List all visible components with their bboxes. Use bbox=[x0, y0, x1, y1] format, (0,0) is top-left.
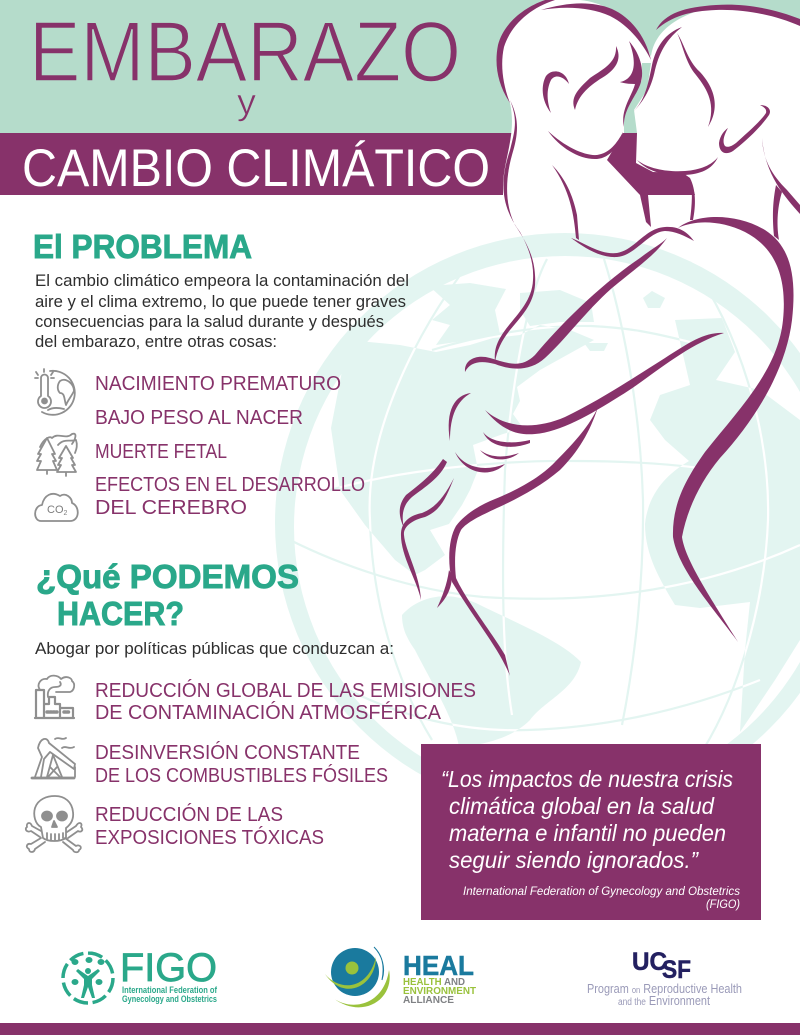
list: policy actions: REDUCCIÓN DE LAS bbox=[95, 803, 283, 826]
title: cambio climatico: CAMBIO CLIMÁTICO bbox=[22, 139, 490, 198]
quote panel: “Los impactos de nuestra crisis bbox=[441, 766, 733, 792]
child foot bbox=[400, 459, 447, 528]
mother hair top bbox=[656, 5, 800, 30]
list: policy actions bbox=[95, 679, 476, 849]
logo: UCSF: and the Environment bbox=[618, 993, 710, 1008]
mother arm bbox=[485, 333, 724, 434]
logo: FIGO: International Federation of bbox=[122, 985, 218, 996]
mother and child line art bbox=[400, 0, 800, 676]
paragraph: problem description bbox=[35, 271, 409, 351]
child shoulder bbox=[571, 227, 694, 257]
logo: FIGO bbox=[63, 946, 218, 1005]
icon: co2 cloud: 2 bbox=[64, 510, 68, 517]
list: health effects bbox=[95, 373, 365, 519]
paragraph: advocacy intro: Abogar por políticas públicas que conduzcan a: bbox=[35, 639, 394, 658]
mother hair line bbox=[677, 33, 715, 127]
child finger 2 bbox=[483, 432, 530, 447]
logo: UCSF: SF bbox=[662, 956, 691, 984]
branch tip bbox=[437, 570, 452, 608]
paragraph: problem description: del embarazo, entre otras cosas: bbox=[35, 332, 277, 351]
icon: co2 cloud bbox=[35, 494, 78, 521]
mother jaw bbox=[637, 157, 718, 175]
icon: factory bbox=[35, 676, 74, 718]
quote panel: International Federation of Gynecology and Obstetrics bbox=[463, 884, 740, 898]
globe background bbox=[275, 233, 800, 813]
child head top bbox=[541, 3, 651, 60]
paragraph: problem description: El cambio climático empeora la contaminación del bbox=[35, 271, 409, 290]
logo: UCSF: Program on Reproductive Health bbox=[587, 981, 742, 996]
footer band bbox=[0, 1023, 800, 1035]
mother ear bbox=[719, 105, 770, 153]
list: health effects: MUERTE FETAL bbox=[95, 441, 227, 463]
child finger 3 bbox=[480, 450, 519, 459]
list: policy actions: DE LOS COMBUSTIBLES FÓSILES bbox=[95, 764, 388, 787]
quote panel bbox=[421, 744, 761, 920]
heading: el problema: El PROBLEMA bbox=[33, 228, 252, 265]
child finger 1 bbox=[449, 393, 471, 441]
child arm bbox=[465, 238, 667, 372]
mint gap between faces bbox=[624, 63, 651, 133]
child chin bbox=[548, 131, 623, 159]
logo: HEAL: ALLIANCE bbox=[403, 994, 454, 1006]
quote panel: (FIGO) bbox=[706, 897, 740, 911]
title: y: y bbox=[237, 81, 256, 122]
list: policy actions: EXPOSICIONES TÓXICAS bbox=[95, 826, 324, 849]
icon: skull and crossbones bbox=[26, 796, 82, 852]
heading: que podemos hacer bbox=[36, 558, 299, 632]
logo: FIGO: FIGO bbox=[120, 946, 217, 990]
list: health effects: EFECTOS EN EL DESARROLLO bbox=[95, 474, 365, 496]
logo: FIGO: Gynecology and Obstetrics bbox=[122, 994, 217, 1005]
list: policy actions: DESINVERSIÓN CONSTANTE bbox=[95, 741, 360, 764]
mother forearm lower bbox=[449, 407, 598, 676]
quote panel: seguir siendo ignorados.” bbox=[449, 847, 699, 873]
child finger 4 bbox=[455, 452, 505, 472]
list: health effects: BAJO PESO AL NACER bbox=[95, 407, 303, 429]
heading: que podemos hacer: ¿Qué PODEMOS bbox=[36, 558, 299, 595]
white silhouette of mother and child bbox=[497, 0, 800, 196]
mother neck bbox=[690, 178, 695, 220]
mother shoulder right bbox=[762, 138, 800, 214]
child leg bbox=[401, 478, 454, 600]
list: policy actions: DE CONTAMINACIÓN ATMOSFÉRICA bbox=[95, 701, 442, 724]
logo: HEAL bbox=[325, 947, 477, 1007]
stripe under chin bbox=[640, 195, 651, 227]
mother face edge bbox=[633, 27, 682, 112]
list: policy actions: REDUCCIÓN GLOBAL DE LAS EMISIONES bbox=[95, 679, 476, 702]
child hair swirl bbox=[573, 46, 619, 110]
icon: burning forest bbox=[37, 434, 77, 476]
child back bbox=[495, 100, 535, 362]
child neck bbox=[552, 165, 579, 240]
header purple band bbox=[0, 133, 800, 195]
child face bbox=[620, 41, 642, 127]
heading: que podemos hacer: HACER? bbox=[57, 595, 184, 632]
logo: HEAL: HEALTH AND bbox=[403, 976, 465, 988]
quote panel: climática global en la salud bbox=[449, 793, 715, 819]
child head outline bbox=[496, 0, 555, 103]
list: health effects: NACIMIENTO PREMATURO bbox=[95, 373, 341, 395]
header mint background bbox=[0, 0, 800, 133]
child ear bbox=[543, 71, 569, 113]
logo: HEAL: HEAL bbox=[403, 950, 474, 981]
quote panel: materna e infantil no pueden bbox=[449, 820, 726, 846]
logo: UCSF bbox=[587, 948, 742, 1008]
logo: HEAL: ENVIRONMENT bbox=[403, 985, 477, 997]
mother body bbox=[673, 217, 794, 642]
paragraph: problem description: consecuencias para la salud durante y después bbox=[35, 312, 384, 331]
logo: UCSF: UC bbox=[632, 948, 667, 976]
mother collar bbox=[773, 185, 782, 240]
purple wedge below faces bbox=[607, 133, 695, 195]
paragraph: problem description: aire y el clima extremo, lo que puede tener graves bbox=[35, 292, 406, 311]
icon: thermometer and globe bbox=[35, 369, 75, 415]
icon: oil pumpjack bbox=[32, 738, 75, 778]
icon: co2 cloud: CO bbox=[47, 504, 64, 516]
title: embarazo: EMBARAZO bbox=[29, 5, 461, 100]
list: health effects: DEL CEREBRO bbox=[95, 497, 247, 519]
